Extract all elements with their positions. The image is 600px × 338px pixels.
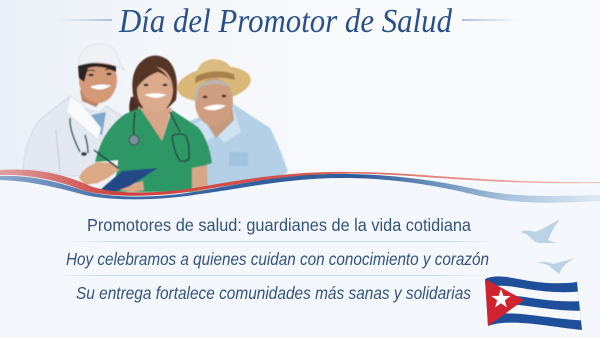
text: line 2: Hoy celebramos a quienes cuidan con conocimiento y corazón: [66, 249, 489, 269]
clipboard and hands: [79, 150, 158, 192]
person: older man with straw hat: [175, 59, 288, 191]
person: nurse in green scrubs: [95, 56, 212, 192]
icon: dove large: [520, 219, 560, 243]
divider: [70, 241, 495, 242]
wave ribbon in flag colours: [0, 170, 600, 203]
text: line 3: Su entrega fortalece comunidades más sanas y solidarias: [76, 283, 471, 303]
person: man in white coat and cap: [23, 44, 124, 176]
white ground below the people: [0, 175, 600, 338]
divider: [55, 275, 485, 276]
icon: dove small: [537, 258, 575, 274]
illustration: three health workers: [23, 44, 288, 192]
title: Día del Promotor de Salud: [118, 3, 453, 40]
icon: Cuban flag: [485, 276, 582, 330]
text: line 1: Promotores de salud: guardianes de la vida cotidiana: [87, 215, 471, 235]
